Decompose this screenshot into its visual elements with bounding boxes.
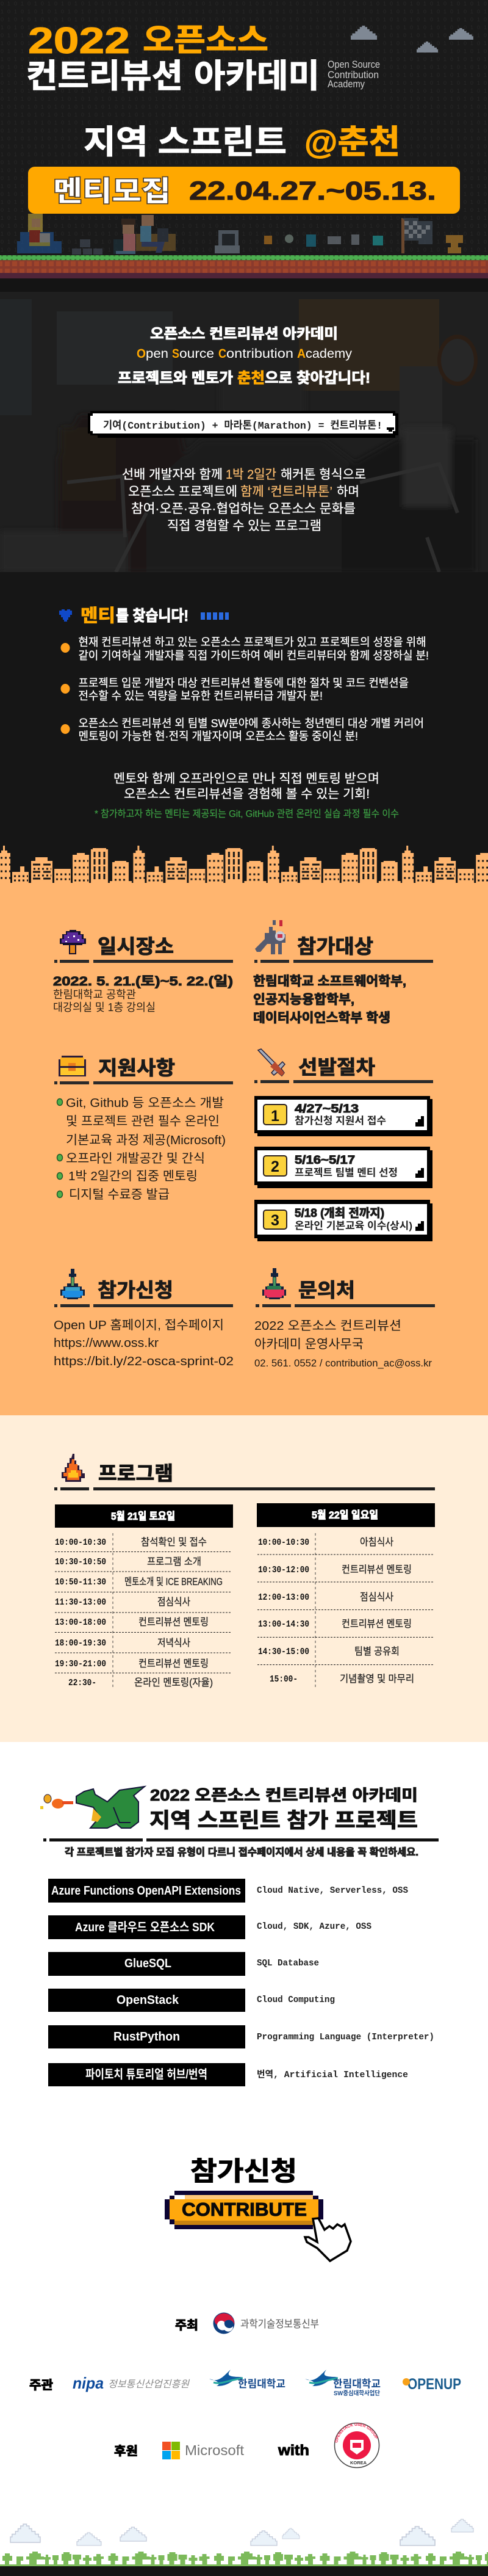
subheading: english name: S xyxy=(172,347,179,361)
project row: Azure SDK: Azure 클라우드 오픈소스 SDK xyxy=(75,1920,215,1934)
text block: offline mentoring opportunity: 멘토와 함께 오프라인으로 만나 직접 멘토링 받으며 xyxy=(113,772,379,786)
icon: header clouds xyxy=(351,26,473,53)
English academy name: Contribution xyxy=(328,69,379,81)
text block: mentee criteria: 오픈소스 컨트리뷰션 외 팀별 SW분야에 종사하는 청년멘티 대상 개별 커리어 xyxy=(78,717,424,730)
logo: Hallym University xyxy=(209,2370,285,2390)
text block: mentee criteria: 프로젝트 입문 개발자 대상 컨트리뷰션 활동에 대한 절차 및 코드 컨벤션을 xyxy=(78,677,409,689)
callout: contribution plus marathon: 기여(Contribution) + 마라톤(Marathon) = 컨트리뷰톤! xyxy=(103,419,382,432)
subheading: english name: ource xyxy=(179,347,214,361)
table: day one: 컨트리뷰션 멘토링 xyxy=(138,1658,209,1669)
sponsor row: host: 주최 xyxy=(175,2318,198,2332)
logo: OpenUP: OPENUP xyxy=(407,2376,461,2393)
text block: application links: Open UP 홈페이지, 접수페이지 xyxy=(54,1318,224,1332)
icon: green bullets xyxy=(57,1099,62,1198)
text block: mentee criteria: 전수할 수 있는 역량을 보유한 컨트리뷰터급 개발자 분! xyxy=(78,689,323,702)
button: contribute xyxy=(165,2191,323,2229)
table: day one: 점심식사 xyxy=(157,1596,190,1608)
text block: offline mentoring opportunity xyxy=(113,772,379,801)
card: step 2: 프로젝트 팀별 멘티 선정 xyxy=(295,1167,398,1178)
subheading: english name xyxy=(137,347,353,361)
table: day one: 프로그램 소개 xyxy=(147,1556,201,1567)
table: day one: 10:30-10:50 xyxy=(55,1557,106,1567)
heading: date and place: 일시장소 xyxy=(98,935,174,957)
table: day one: 13:00-18:00 xyxy=(55,1617,106,1628)
heading: projects and mentors come to Chuncheon: 춘천 xyxy=(237,370,265,386)
text block: mentee criteria: 현재 컨트리뷰션 하고 있는 오픈소스 프로젝트가 있고 프로젝트의 성장을 위해 xyxy=(78,636,426,648)
logo: Hallym SW project group: 한림대학교 xyxy=(333,2378,381,2390)
text block: departments xyxy=(253,974,406,1025)
heading: projects and mentors come to Chuncheon: 프로젝트와 멘토가 xyxy=(118,370,233,386)
heading: mentee search: 멘티 xyxy=(81,606,115,626)
heading: projects: 2022 오픈소스 컨트리뷰션 아카데미 xyxy=(150,1787,418,1804)
table: day two: 13:00-14:30 xyxy=(258,1619,309,1630)
text block: departments: 데이터사이언스학부 학생 xyxy=(253,1011,390,1025)
heading: projects and mentors come to Chuncheon xyxy=(118,370,370,386)
icon: blue potion xyxy=(60,1269,85,1299)
footer ground xyxy=(0,2564,488,2576)
section: date and venue xyxy=(53,930,233,1014)
card: step 2 xyxy=(254,1147,432,1188)
table: day one: 멘토소개 및 ICE BREAKING xyxy=(124,1576,223,1587)
table: day one: 18:00-19:30 xyxy=(55,1638,106,1649)
icon: woman on couch xyxy=(17,214,62,253)
text block: program description: 직접 경험할 수 있는 프로그램 xyxy=(167,519,321,533)
text block: program description: 하며 xyxy=(337,485,359,499)
icon: pixel dragon breathing fire xyxy=(40,1787,145,1828)
heading: projects and mentors come to Chuncheon: 으로 찾아갑니다! xyxy=(265,370,370,386)
heading: target participants: 참가대상 xyxy=(297,935,373,957)
logo: NIPA: nipa xyxy=(73,2374,104,2392)
text block: support list: 디지털 수료증 발급 xyxy=(69,1188,170,1202)
title: 컨트리뷰션 xyxy=(26,58,183,95)
table: day two: 14:30-15:00 xyxy=(258,1647,309,1657)
text block: departments: 인공지능융합학부, xyxy=(253,993,354,1007)
logo: NIPA xyxy=(73,2374,190,2392)
logo: Hallym University: 한림대학교 xyxy=(238,2378,285,2390)
logo: NIPA: 정보통신산업진흥원 xyxy=(108,2379,190,2390)
section: support xyxy=(54,1056,233,1202)
panel: event information xyxy=(0,883,488,1415)
sponsor row: supporters xyxy=(114,2423,379,2468)
table: day two: 컨트리뷰션 멘토링 xyxy=(342,1564,412,1575)
card: step 3: 3 xyxy=(271,1212,279,1229)
text block: support list: Git, Github 등 오픈소스 개발 xyxy=(66,1096,224,1110)
heading: academy name: 오픈소스 컨트리뷰션 아카데미 xyxy=(150,325,338,341)
banner: mentor recruitment dates xyxy=(28,167,460,214)
note: check details: 각 프로젝트별 참가자 모집 유형이 다르니 접수페이지에서 상세 내용을 꼭 확인하세요. xyxy=(65,1846,418,1858)
heading: mentee search xyxy=(81,606,188,626)
skyline xyxy=(0,846,488,883)
text block: offline mentoring opportunity: 오픈소스 컨트리뷰션을 경험해 볼 수 있는 기회! xyxy=(124,787,370,801)
project row: RustPython xyxy=(48,2025,434,2048)
section: application xyxy=(54,1269,234,1368)
sponsor row: supporters: with xyxy=(278,2442,309,2459)
text block: contact details: 2022 오픈소스 컨트리뷰션 xyxy=(254,1319,401,1333)
card: step 1 xyxy=(254,1096,432,1136)
pixel ground xyxy=(0,255,488,278)
card: step 3 xyxy=(254,1200,432,1241)
text block: support list: 1박 2일간의 집중 멘토링 xyxy=(68,1169,198,1183)
project row: PyTorch tutorial xyxy=(48,2063,408,2086)
icon: white clouds xyxy=(10,2519,473,2545)
heading: mentee search: 를 찾습니다! xyxy=(116,608,188,625)
table: day one: 22:30- xyxy=(68,1678,96,1688)
table: day two: 5월 22일 일요일 xyxy=(312,1509,378,1521)
card: step 3: 온라인 기본교육 이수(상시) xyxy=(295,1220,412,1232)
panel: intro with dark photo background xyxy=(0,278,488,573)
text block: program description: 참여·오픈·공유·협업하는 오픈소스 문화를 xyxy=(131,502,356,516)
table: day one: 10:50-11:30 xyxy=(55,1577,106,1587)
icon: treasure chest xyxy=(59,1056,86,1076)
project row: PyTorch tutorial: 파이토치 튜토리얼 허브/번역 xyxy=(85,2067,207,2081)
sponsor row: organizers: 주관 xyxy=(29,2378,53,2392)
text block: mentee criteria: 멘토링이 가능한 현·전직 개발자이며 오픈소스 활동 중이신 분! xyxy=(78,730,358,742)
project row: PyTorch tutorial: 번역, Artificial Intelligence xyxy=(257,2069,408,2080)
section: contact xyxy=(254,1268,435,1369)
table: day two: 10:00-10:30 xyxy=(258,1537,309,1548)
icon: pointer hand xyxy=(305,2218,351,2261)
subheading: english name: ontribution xyxy=(226,347,293,361)
subheading: english name: A xyxy=(297,347,306,361)
subheading: english name: O xyxy=(137,347,146,361)
table: day two xyxy=(257,1503,435,1689)
callout: contribution plus marathon xyxy=(88,411,398,438)
icon: red potion xyxy=(262,1268,286,1299)
table: day one: 온라인 멘토링(자율) xyxy=(134,1677,213,1688)
note: required course: * 참가하고자 하는 멘티는 제공되는 Git, GitHub 관련 온라인 실습 과정 필수 이수 xyxy=(95,808,399,819)
table: day two: 점심식사 xyxy=(360,1591,393,1603)
section: eligibility xyxy=(253,920,433,1025)
text block: support list: 및 프로젝트 관련 필수 온라인 xyxy=(66,1114,220,1128)
text block: date and venue details: 2022. 5. 21.(토)~5. 22.(일) xyxy=(53,974,233,989)
English academy name: Open Source xyxy=(328,59,380,70)
text block: program description: 해커톤 형식으로 xyxy=(281,468,366,482)
table: day one xyxy=(55,1504,233,1689)
logo: OpenStack user group Korea: KOREA xyxy=(350,2460,367,2465)
heading: apply: 참가신청 xyxy=(98,1279,173,1301)
icon: blue heart xyxy=(59,609,72,622)
table: day one: 컨트리뷰션 멘토링 xyxy=(138,1616,209,1628)
heading: regional sprint: @춘천 xyxy=(304,124,400,161)
project row: OpenStack xyxy=(48,1989,335,2012)
text block: date and venue details: 대강의실 및 1층 강의실 xyxy=(53,1001,156,1014)
illustration: pixel characters and objects xyxy=(17,214,463,255)
text block: program description xyxy=(122,468,366,533)
heading: regional sprint: 지역 스프린트 xyxy=(84,124,287,161)
card: step 1: 참가신청 지원서 접수 xyxy=(295,1115,386,1127)
sponsor row: host: 과학기술정보통신부 xyxy=(240,2318,319,2330)
table: day one: 19:30-21:00 xyxy=(55,1659,106,1669)
heading: support items: 지원사항 xyxy=(98,1057,175,1079)
text block: departments: 한림대학교 소프트웨어학부, xyxy=(253,974,406,989)
icon: checkered flag xyxy=(401,218,432,253)
text block: contact details: 02. 561. 0552 / contribution_ac@oss.kr xyxy=(254,1357,432,1369)
project row: Azure SDK: Cloud, SDK, Azure, OSS xyxy=(257,1921,371,1932)
text block: program description: 함께 ‘컨트리뷰톤’ xyxy=(240,485,332,499)
text block: support list xyxy=(66,1096,226,1202)
project row: GlueSQL: SQL Database xyxy=(257,1958,319,1968)
project row: RustPython: Programming Language (Interpreter) xyxy=(257,2032,434,2042)
text block: support list: 오프라인 개발공간 및 간식 xyxy=(66,1152,205,1166)
table: day two: 12:00-13:00 xyxy=(258,1592,309,1603)
heading: projects: 지역 스프린트 참가 프로젝트 xyxy=(149,1809,418,1832)
panel: looking for mentees xyxy=(0,572,488,846)
icon: developers on sofa xyxy=(113,215,176,254)
project row: RustPython: RustPython xyxy=(113,2030,180,2044)
sponsor row: organizers xyxy=(29,2370,461,2397)
section: selection process xyxy=(254,1049,433,1241)
icon: retro computer xyxy=(215,230,240,253)
English academy name xyxy=(328,59,380,90)
card: step 2: 5/16~5/17 xyxy=(295,1154,355,1167)
logo: Microsoft xyxy=(162,2442,245,2459)
table: day one: 참석확인 및 접수 xyxy=(141,1536,207,1548)
project row: OpenStack: OpenStack xyxy=(117,1994,179,2007)
heading: apply: 참가신청 xyxy=(190,2157,297,2186)
project row: OpenStack: Cloud Computing xyxy=(257,1995,335,2005)
text block: application links xyxy=(54,1318,234,1368)
table: day two: 컨트리뷰션 멘토링 xyxy=(342,1618,412,1630)
project row: Azure SDK xyxy=(48,1915,371,1939)
project row: Azure Functions xyxy=(48,1879,408,1903)
icon: trophy xyxy=(446,235,463,253)
text block: date and venue details: 한림대학교 공학관 xyxy=(53,989,136,1001)
heading: regional sprint xyxy=(84,124,400,161)
text block: mentee criteria xyxy=(78,636,429,742)
card: step 2: 2 xyxy=(271,1158,279,1175)
panel: participating projects xyxy=(2,1785,488,2564)
table: day one: 10:00-10:30 xyxy=(55,1537,106,1548)
title: 오픈소스 xyxy=(143,23,268,57)
header background xyxy=(0,0,488,292)
sponsor row: supporters: 후원 xyxy=(114,2444,138,2458)
logo: Microsoft: Microsoft xyxy=(185,2442,245,2458)
table: day one: 5월 21일 토요일 xyxy=(111,1511,175,1522)
text block: application links: https://bit.ly/22-osca-sprint-02 xyxy=(54,1354,234,1368)
icon: taegeuk emblem xyxy=(214,2313,234,2334)
icon: knight xyxy=(255,920,285,954)
icon: pixel sword xyxy=(258,1049,285,1076)
heading: projects xyxy=(149,1787,418,1832)
photo background xyxy=(0,292,488,572)
table: day two: 15:00- xyxy=(270,1674,298,1685)
icon: WASD keys xyxy=(72,239,102,255)
title: 아카데미 xyxy=(194,58,320,95)
button: contribute: CONTRIBUTE xyxy=(182,2199,307,2220)
table: day one: 저녁식사 xyxy=(157,1637,190,1649)
icon: small items xyxy=(264,234,383,247)
logo: Hallym SW project group: SW중심대학사업단 xyxy=(334,2389,380,2397)
banner: mentor recruitment dates: 22.04.27.~05.13. xyxy=(189,176,436,206)
card: step 1: 4/27~5/13 xyxy=(295,1103,359,1116)
panel: program schedule xyxy=(0,1415,488,1742)
logo: OpenStack user group Korea: OPENSTACK USER GROUP xyxy=(335,2423,378,2442)
heading: program: 프로그램 xyxy=(98,1462,173,1484)
icon: blue energy meter xyxy=(201,612,229,620)
title xyxy=(26,20,320,95)
project row: Azure Functions: Azure Functions OpenAPI Extensions xyxy=(51,1884,241,1898)
card: step 3: 5/18 (개최 전까지) xyxy=(295,1206,384,1220)
banner: mentor recruitment dates: 멘티모집 xyxy=(53,175,171,207)
text block: contact details: 아카데미 운영사무국 xyxy=(254,1337,364,1351)
table: day two: 아침식사 xyxy=(360,1536,393,1548)
table: day two: 기념촬영 및 마무리 xyxy=(340,1673,414,1685)
subheading: english name: C xyxy=(218,347,226,361)
icon: coins xyxy=(61,643,70,734)
text block: program description: 선배 개발자와 함께 xyxy=(122,468,223,482)
table: day two: 10:30-12:00 xyxy=(258,1565,309,1575)
card: step 1: 1 xyxy=(271,1108,279,1125)
English academy name: Academy xyxy=(328,78,365,90)
project row: GlueSQL xyxy=(48,1952,319,1976)
title: 2022 xyxy=(28,20,130,61)
icon: fire xyxy=(62,1454,85,1482)
heading: contact: 문의처 xyxy=(298,1279,355,1301)
text block: contact details xyxy=(254,1319,432,1369)
sponsor row: host xyxy=(175,2313,319,2334)
project row: GlueSQL: GlueSQL xyxy=(124,1957,171,1970)
text block: support list: 기본교육 과정 제공(Microsoft) xyxy=(66,1133,226,1147)
tree band xyxy=(0,2552,488,2564)
text block: mentee criteria: 같이 기여하실 개발자를 직접 가이드하여 예비 컨트리뷰터와 함께 성장하실 분! xyxy=(78,649,429,662)
logo: Hallym SW project group xyxy=(305,2370,381,2397)
icon: purple mushroom xyxy=(60,930,86,954)
project row: Azure Functions: Cloud Native, Serverless, OSS xyxy=(257,1885,408,1896)
heading: selection steps: 선발절차 xyxy=(298,1056,375,1078)
table: day one: 11:30-13:00 xyxy=(55,1597,106,1608)
text block: application links: https://www.oss.kr xyxy=(54,1336,159,1350)
subheading: english name: cademy xyxy=(306,347,353,361)
logo: OpenStack user group Korea xyxy=(334,2423,379,2468)
subheading: english name: pen xyxy=(146,347,168,361)
text block: program description: 1박 2일간 xyxy=(226,468,276,482)
table: day two: 팀별 공유회 xyxy=(354,1645,400,1657)
text block: program description: 오픈소스 프로젝트에 xyxy=(128,485,237,499)
text block: date and venue details xyxy=(53,974,233,1014)
